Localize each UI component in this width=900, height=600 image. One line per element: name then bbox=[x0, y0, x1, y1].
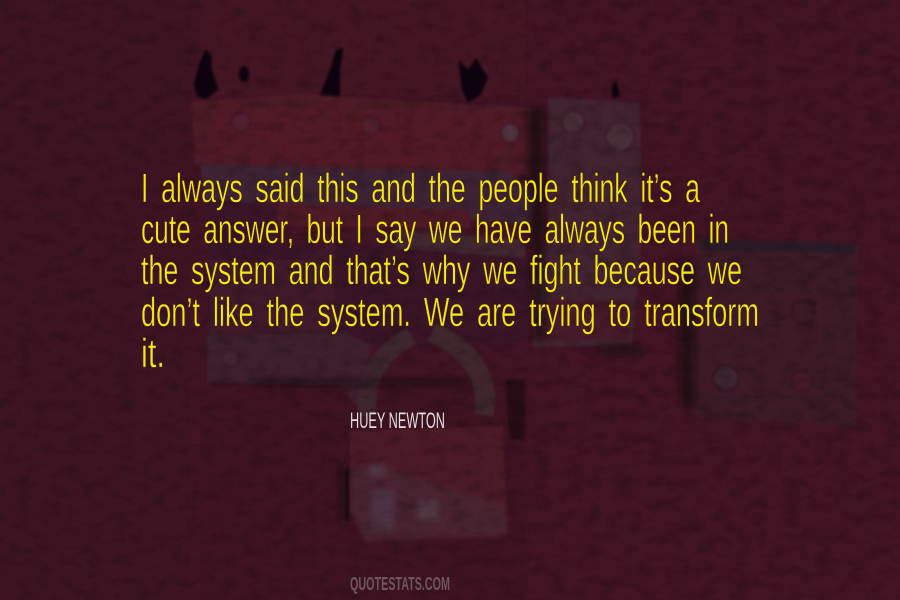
author name: HUEY NEWTON bbox=[350, 408, 445, 433]
door crack bbox=[523, 0, 527, 600]
quote text: it. bbox=[141, 330, 165, 376]
quote text bbox=[141, 165, 759, 376]
padlock hardware illustration bbox=[192, 94, 858, 540]
padlock shackle bbox=[367, 332, 485, 415]
grey bands of the hasp bbox=[200, 165, 535, 385]
right plate bbox=[693, 238, 858, 427]
site credit: QUOTESTATS.COM bbox=[350, 574, 450, 594]
hinge plate bbox=[533, 97, 642, 347]
padlock body bbox=[345, 426, 507, 540]
screws and dark nail holes bbox=[194, 48, 814, 525]
lower left plate bbox=[207, 332, 372, 410]
upper red hasp plate bbox=[192, 94, 530, 175]
